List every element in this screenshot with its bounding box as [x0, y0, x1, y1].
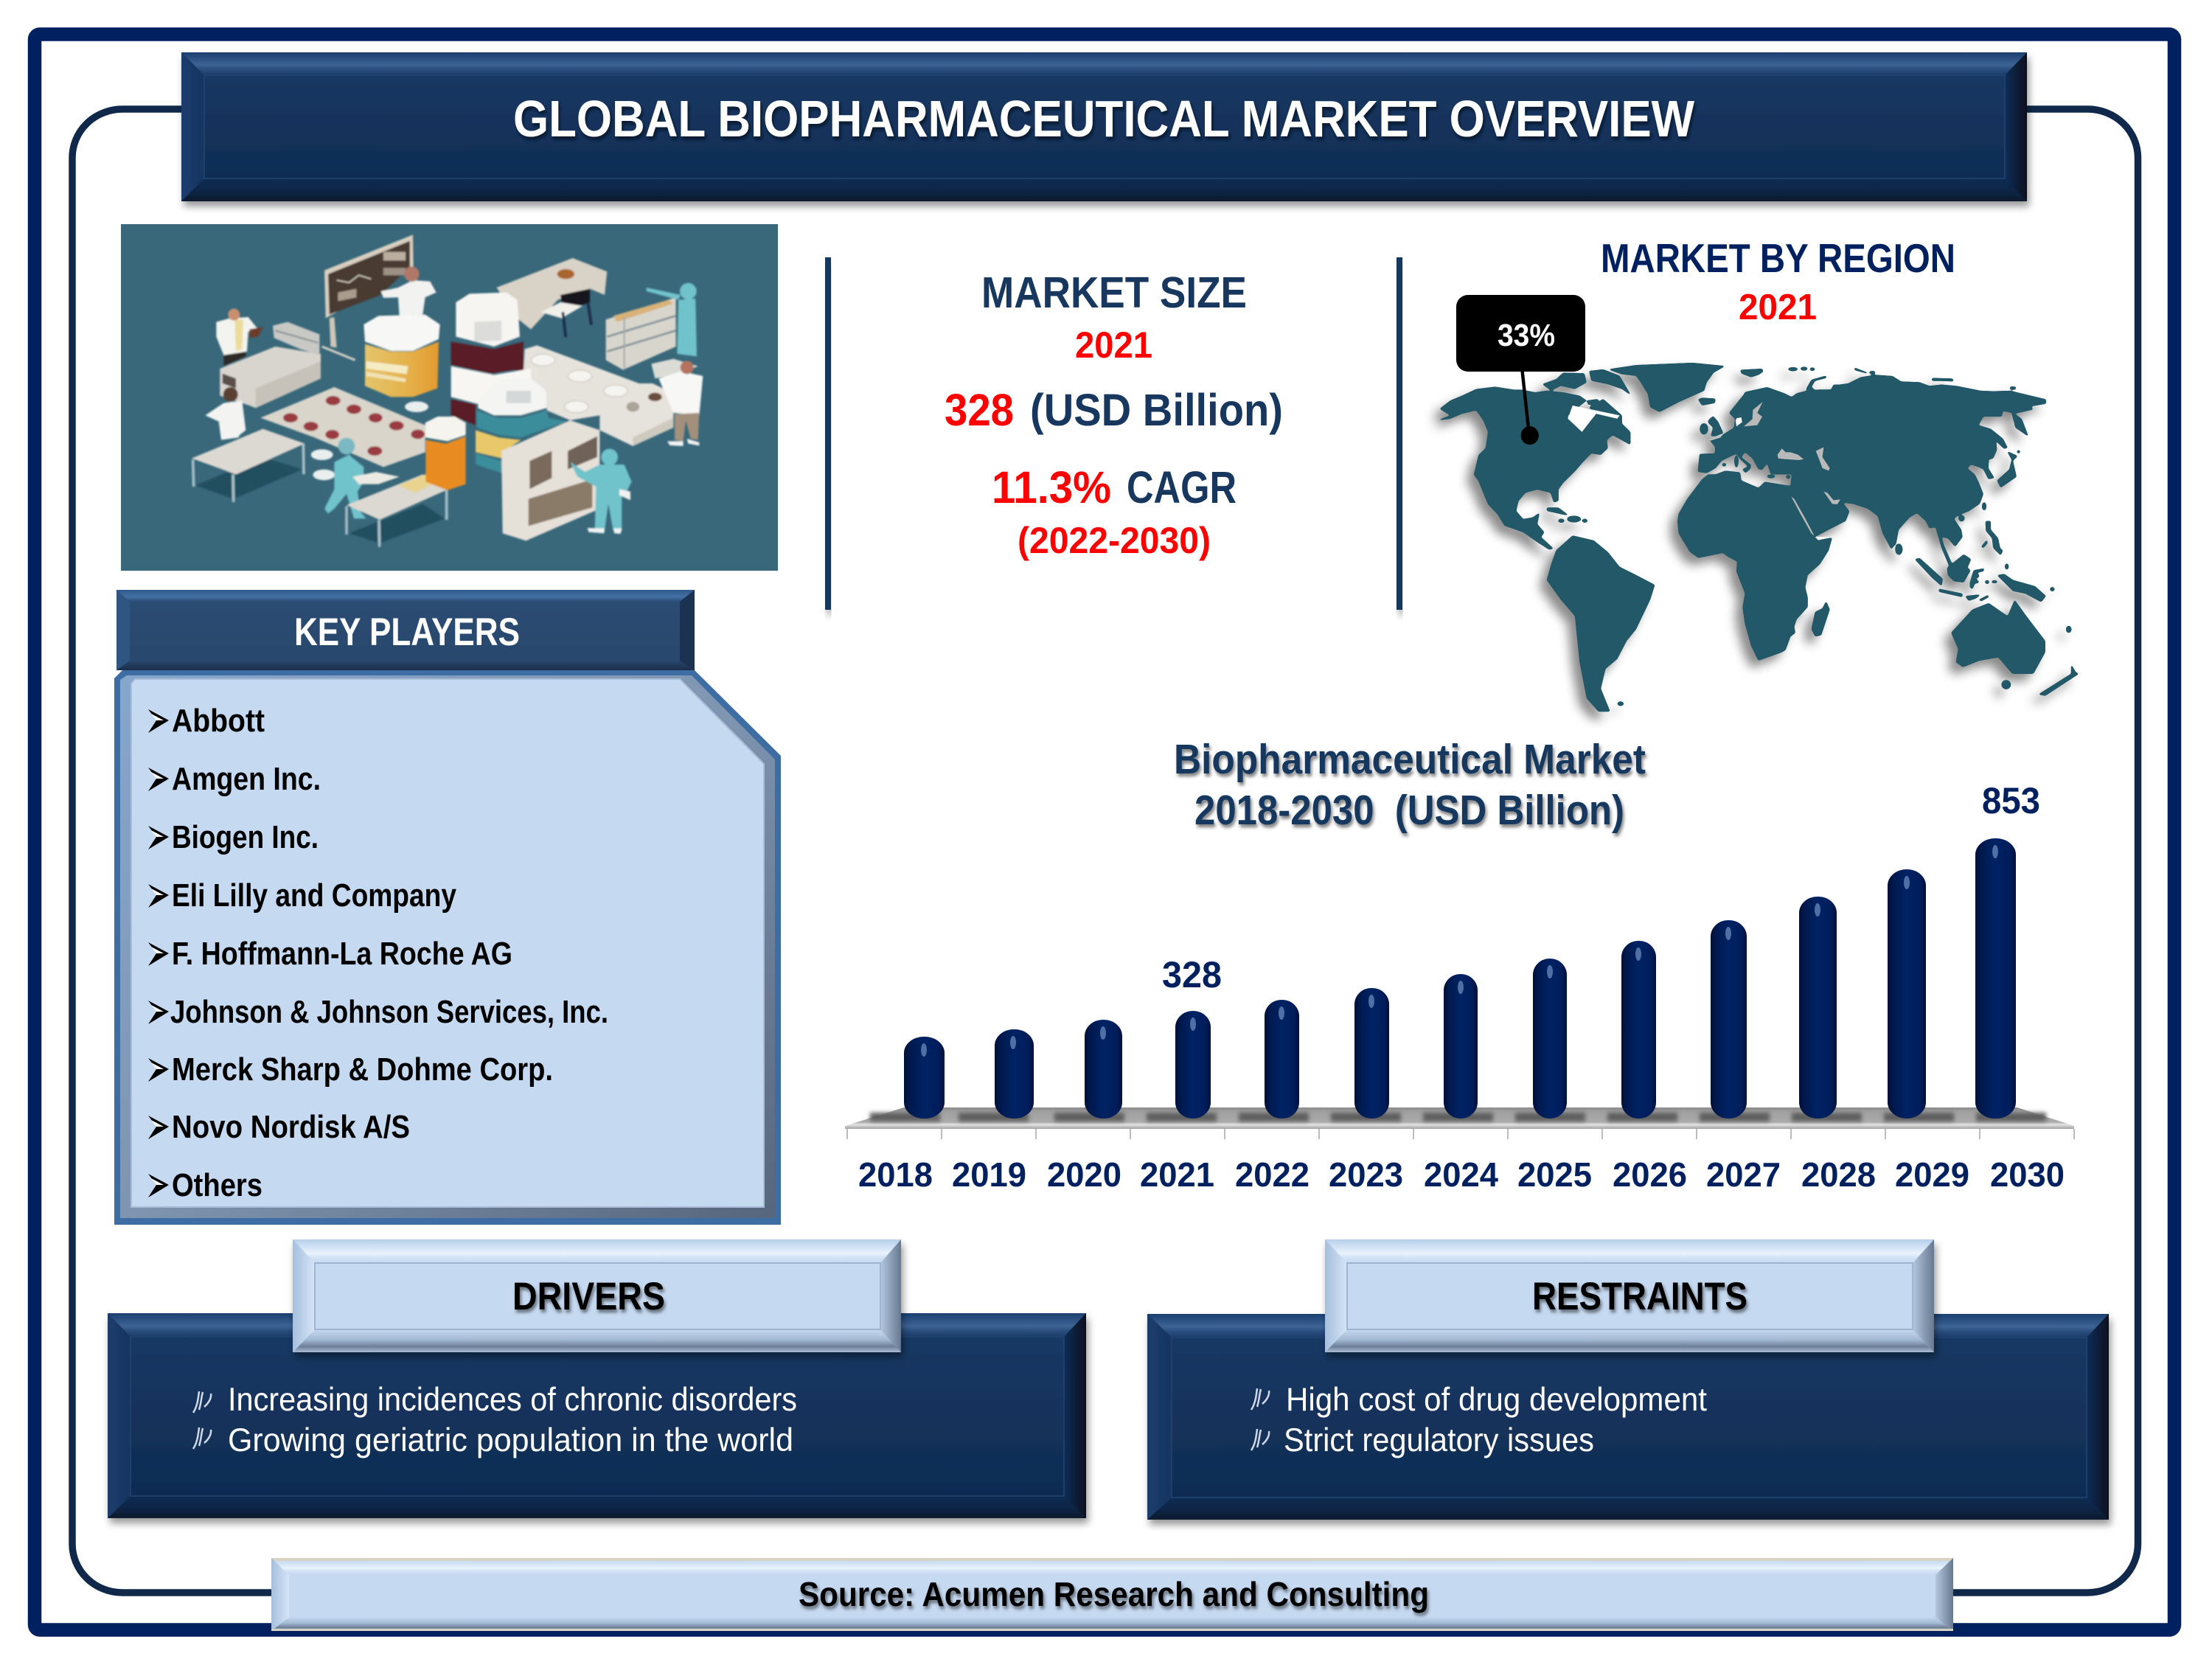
- year axis labels: 2030: [1990, 1155, 2065, 1194]
- list item: Amgen: Amgen Inc.: [172, 762, 321, 797]
- chart title: [1174, 736, 1646, 834]
- restraint item 2: Strict regulatory issues: [1284, 1422, 1594, 1458]
- restraints header: [1325, 1239, 1934, 1352]
- map pointer: [1521, 371, 1539, 445]
- list item: Merck: Merck Sharp & Dohme Corp.: [172, 1052, 553, 1088]
- key players header: KEY PLAYERS: [294, 611, 520, 654]
- year axis labels: 2025: [1517, 1155, 1592, 1194]
- year axis labels: 2028: [1801, 1155, 1876, 1194]
- panel: key players: [114, 590, 781, 1225]
- data label: 853: 853: [1982, 780, 2040, 821]
- market by region heading: MARKET BY REGION: [1601, 235, 1955, 281]
- bars: [904, 838, 2016, 1119]
- list item: Johnson and Johnson: Johnson & Johnson Services, Inc.: [170, 995, 608, 1030]
- year axis labels: 2026: [1613, 1155, 1687, 1194]
- CAGR value: 11.3%: [992, 462, 1111, 512]
- market size heading: MARKET SIZE: [981, 268, 1247, 317]
- bar highlights: [921, 845, 1998, 1057]
- year axis labels: 2020: [1047, 1155, 1121, 1194]
- source bar: Source: Acumen Research and Consulting: [799, 1575, 1429, 1613]
- market size value: (USD Billion): [1030, 385, 1283, 435]
- chart title: 2018-2030 (USD Billion): [1194, 787, 1624, 834]
- year axis labels: 2029: [1895, 1155, 1969, 1194]
- chart floor: [845, 1107, 2074, 1139]
- market size value: 328: [945, 385, 1014, 435]
- Africa: [1677, 470, 1832, 661]
- list item: Novo Nordisk: Novo Nordisk A/S: [172, 1110, 410, 1145]
- year axis labels: 2027: [1706, 1155, 1781, 1194]
- divider: left of market by region: [1397, 257, 1402, 610]
- inland seas: [1709, 402, 1840, 540]
- year axis labels: 2024: [1424, 1155, 1498, 1194]
- chart title: Biopharmaceutical Market: [1174, 736, 1646, 783]
- illustration: biopharmaceutical laboratory: [121, 224, 778, 571]
- title banner: [181, 52, 2027, 201]
- Japan, Sakhalin: [1997, 451, 2018, 488]
- restraints header: RESTRAINTS: [1532, 1275, 1747, 1318]
- divider: left of market size: [825, 257, 831, 610]
- callout: 33%: [1456, 295, 1585, 372]
- world map: [1435, 363, 2079, 712]
- callout: 33%: 33%: [1498, 318, 1555, 353]
- title text: GLOBAL BIOPHARMACEUTICAL MARKET OVERVIEW: [513, 90, 1694, 147]
- drivers body: [108, 1313, 1086, 1518]
- panel: drivers: [108, 1239, 1086, 1518]
- restraint item 1: High cost of drug development: [1286, 1382, 1708, 1418]
- panel: restraints: [1147, 1239, 2109, 1520]
- Madagascar: [1812, 601, 1830, 636]
- list item: Biogen: Biogen Inc.: [172, 820, 319, 855]
- list item: Others: Others: [172, 1168, 262, 1203]
- Eurasia: [1698, 375, 2046, 566]
- data label: 328: 328: [1162, 954, 1222, 995]
- year axis labels: 2018: [858, 1155, 933, 1194]
- CAGR value: CAGR: [1127, 462, 1237, 512]
- key players header: [116, 590, 695, 670]
- market by region year: 2021: [1739, 288, 1817, 327]
- driver item 2: Growing geriatric population in the world: [228, 1422, 793, 1458]
- Arctic islands: [1740, 369, 1764, 378]
- CAGR value: [992, 462, 1237, 512]
- year axis labels: 2023: [1329, 1155, 1403, 1194]
- drivers header: DRIVERS: [512, 1275, 665, 1318]
- source bar: [271, 1558, 1953, 1631]
- Indonesia: [1915, 558, 1943, 586]
- drivers header: [293, 1239, 901, 1352]
- market size block: [945, 268, 1283, 561]
- year axis labels: 2022: [1235, 1155, 1310, 1194]
- year axis labels: 2019: [952, 1155, 1026, 1194]
- year axis labels: 2021: [1140, 1155, 1214, 1194]
- restraints body: [1147, 1314, 2109, 1520]
- driver item 1: Increasing incidences of chronic disorders: [228, 1382, 797, 1418]
- key players list box: [114, 670, 781, 1225]
- list: company names: [148, 703, 608, 1203]
- CAGR period: (2022-2030): [1018, 520, 1211, 561]
- list item: Roche: F. Hoffmann-La Roche AG: [172, 936, 512, 972]
- year axis labels: [858, 1155, 2065, 1194]
- list item: Abbott: Abbott: [172, 703, 265, 739]
- Britain, Ireland, Iceland: [1708, 416, 1723, 437]
- list item: Eli Lilly: Eli Lilly and Company: [172, 878, 456, 914]
- East Asian islands: [1982, 502, 1986, 510]
- bar chart: [845, 780, 2074, 1194]
- market size year: 2021: [1075, 324, 1152, 366]
